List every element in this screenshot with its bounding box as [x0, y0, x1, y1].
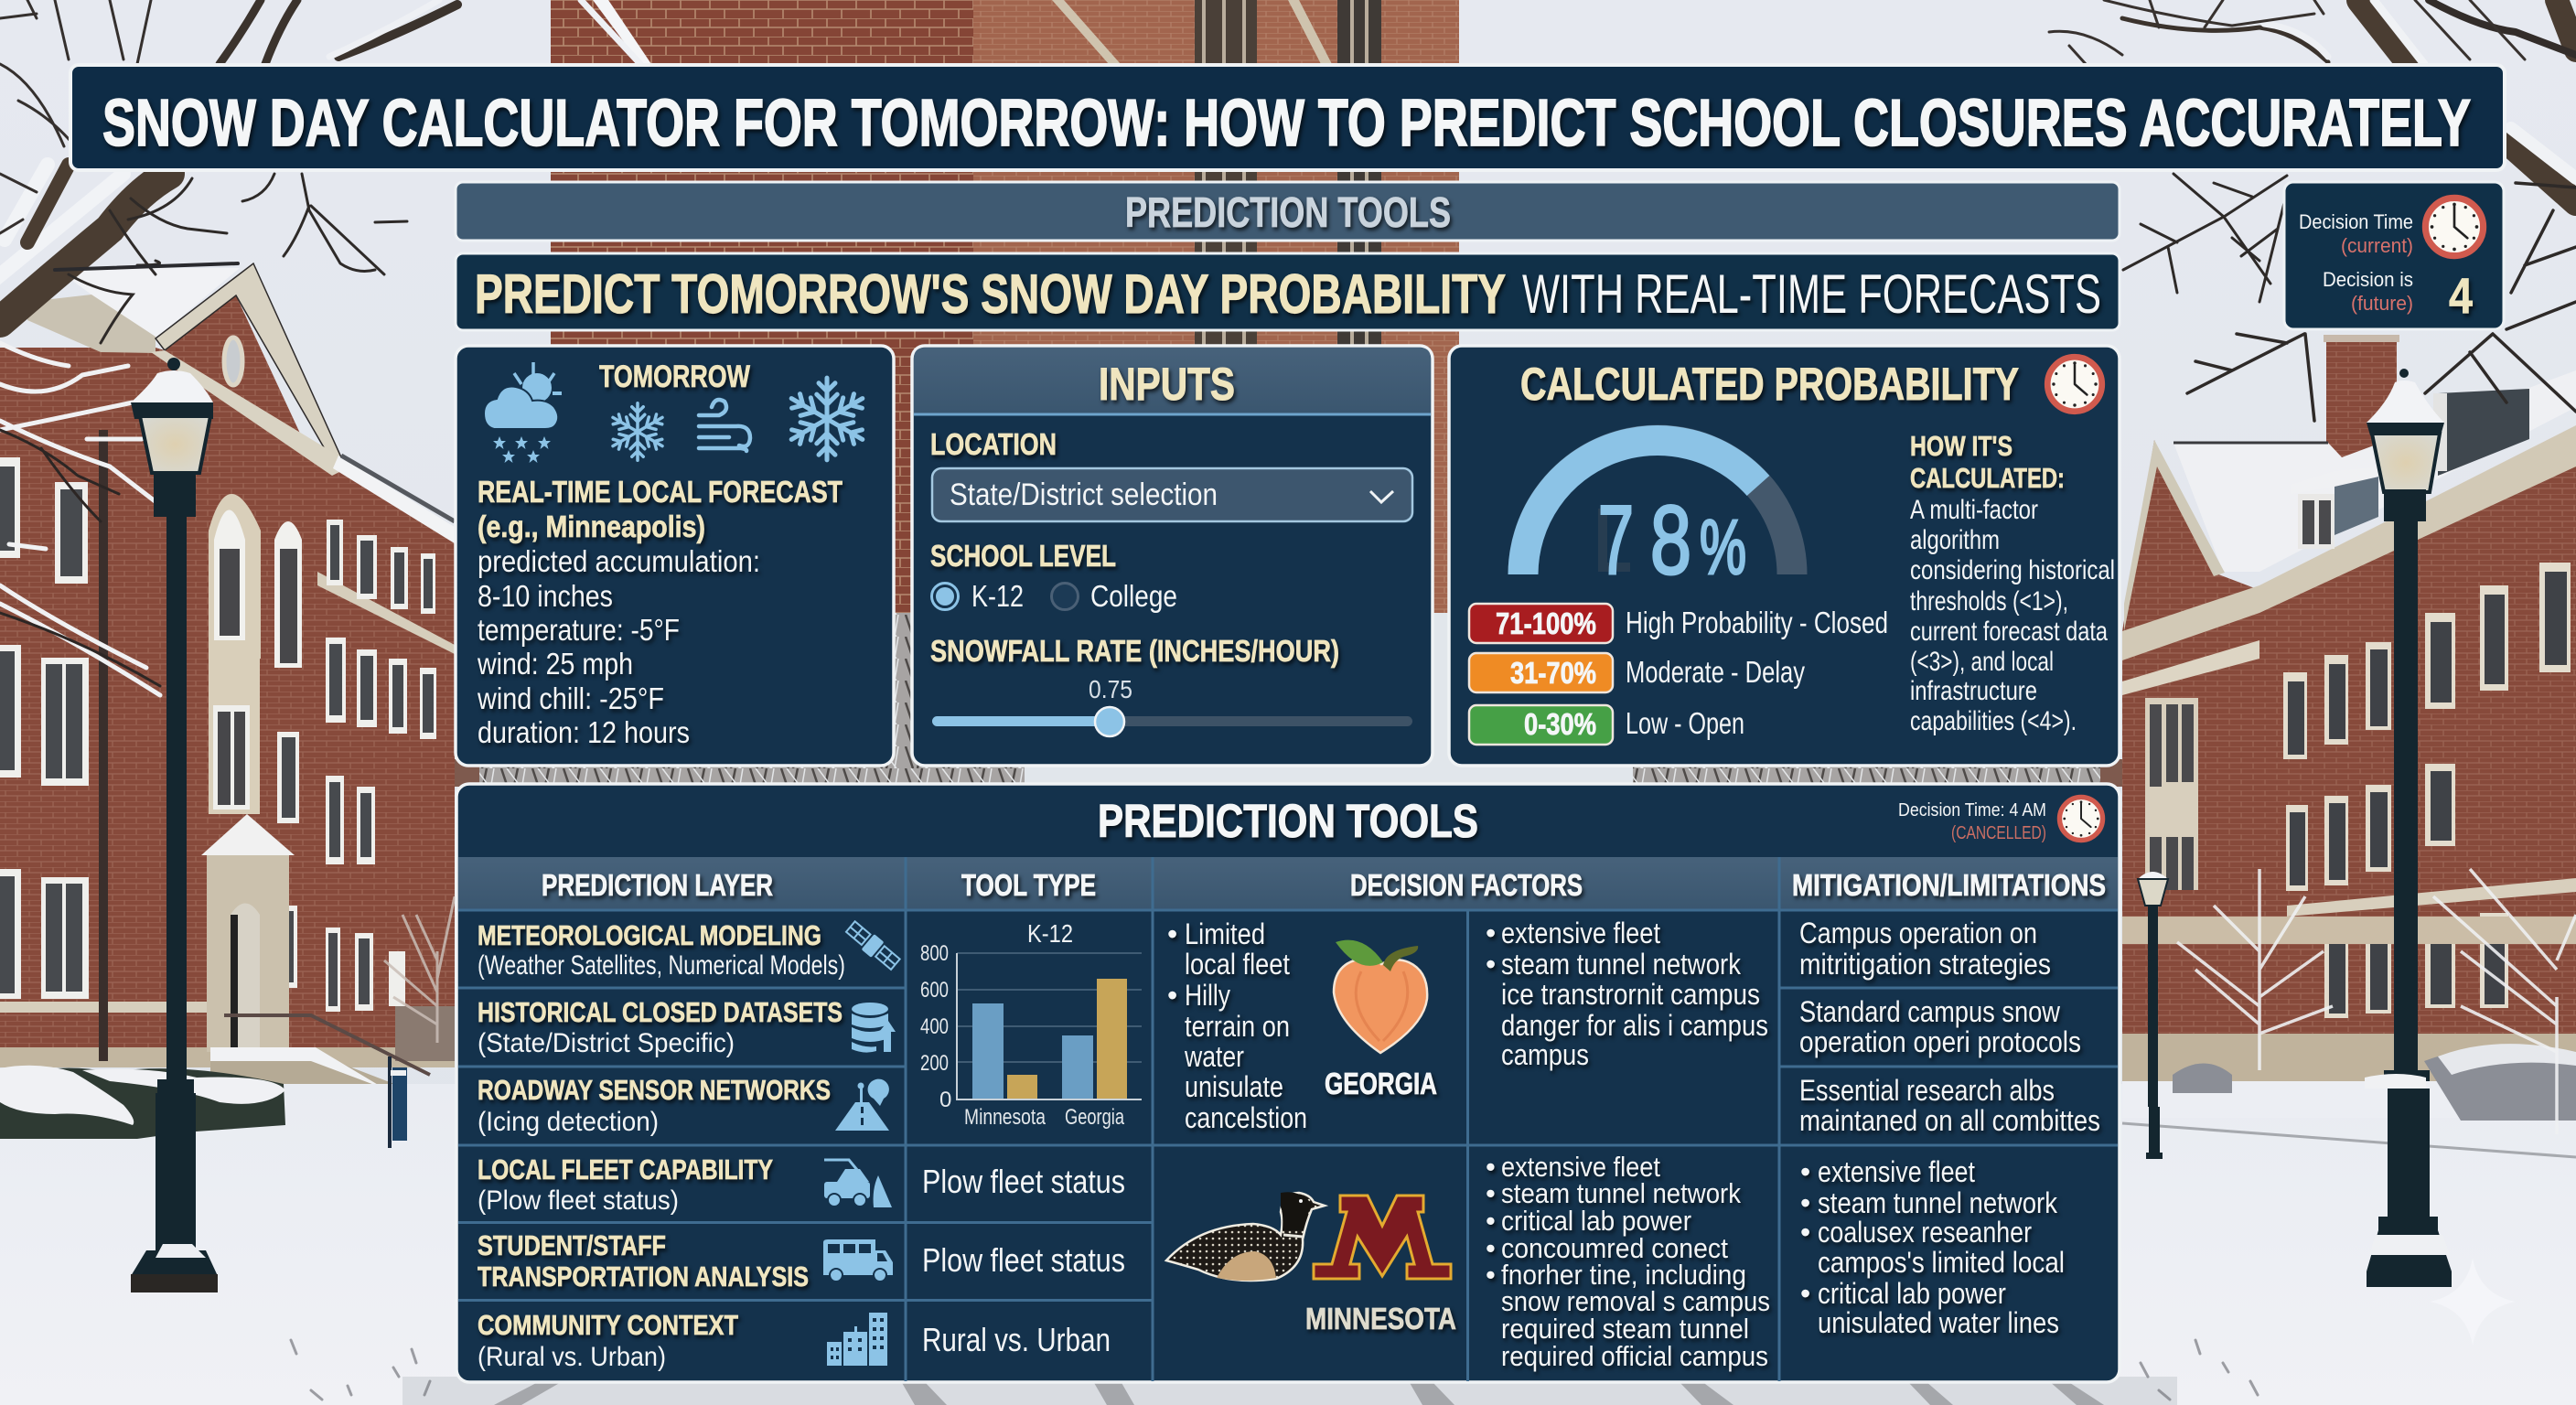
decision factors: lower list: critical lab power [1501, 1205, 1691, 1237]
legend: low: 0-30% [1524, 707, 1596, 741]
row: student staff transportation [478, 1229, 1125, 1292]
row: historical closed datasets: HISTORICAL CLOSED DATASETS [478, 996, 843, 1028]
decision factors: Georgia list: Hilly [1185, 979, 1230, 1012]
bar chart: K-12 closures: Minnesota [964, 1105, 1046, 1130]
row: meteorological modeling: METEOROLOGICAL MODELING [478, 919, 821, 951]
icon: clock [2047, 357, 2102, 412]
decision time callout: Decision is [2323, 268, 2413, 291]
mitigation: upper rows: Essential research albs [1799, 1074, 2055, 1107]
how it's calculated heading [1910, 430, 2065, 494]
mitigation: upper rows: mitritigation strategies [1799, 948, 2051, 981]
legend: moderate: Moderate - Delay [1626, 655, 1805, 689]
decision factors: lower list: extensive fleet [1501, 1151, 1660, 1183]
icon: clock [2425, 198, 2484, 256]
mitigation: lower list: • [1800, 1277, 1810, 1310]
lamp post right large [2365, 369, 2452, 1287]
table heading: PREDICTION TOOLS [1098, 795, 1478, 847]
icon: wind [699, 400, 750, 451]
thick limb [0, 174, 169, 322]
decision factors: upper list: extensive fleet [1501, 917, 1660, 949]
icon: Minnesota M logo [1314, 1196, 1451, 1279]
icon: satellite [843, 919, 902, 972]
decision factors: Georgia list: local fleet [1185, 948, 1290, 981]
forecast heading: (e.g., Minneapolis) [478, 509, 705, 543]
section band: prediction tools [456, 182, 2120, 241]
row: roadway sensor networks: (Icing detection) [478, 1107, 659, 1137]
snowy young trees right [2177, 869, 2576, 1134]
legend: high probability: 71-100% [1496, 606, 1596, 640]
gauge 78 percent: 7 [1598, 485, 1634, 595]
mitigation: upper rows: maintaned on all combittes [1799, 1104, 2100, 1137]
forecast details [477, 544, 760, 749]
row: local fleet capability: LOCAL FLEET CAPABILITY [478, 1153, 773, 1185]
forecast details: predicted accumulation: [478, 544, 760, 578]
forecast details: wind chill: -25°F [477, 681, 664, 715]
mitigation: lower list: steam tunnel network [1818, 1186, 2058, 1219]
radio K-12 selected [931, 579, 1024, 613]
snow covered shrubs [0, 1044, 2576, 1139]
panel: calculated probability [1449, 346, 2120, 766]
radio college: College [1090, 579, 1177, 613]
bar chart: K-12 closures: 800 [920, 941, 949, 966]
decision time callout: (future) [2351, 292, 2413, 315]
decision factors: lower list [1486, 1151, 1770, 1372]
row: student staff transportation: TRANSPORTATION ANALYSIS [478, 1260, 809, 1292]
table header row: PREDICTION LAYER [542, 868, 773, 902]
table header row: TOOL TYPE [961, 868, 1096, 902]
icon: road with pin [835, 1079, 889, 1131]
forecast heading: REAL-TIME LOCAL FORECAST [478, 475, 843, 509]
decision factors: upper list: campus [1501, 1038, 1589, 1071]
ghost digit segments [1603, 509, 1630, 567]
tool type: plow fleet status: Plow fleet status [922, 1163, 1125, 1200]
bar chart: K-12 closures: 200 [920, 1051, 949, 1076]
how it's calculated heading: HOW IT'S [1910, 430, 2012, 462]
how it's calculated body: considering historical [1910, 555, 2115, 585]
decision factors: Georgia list: • [1167, 917, 1177, 950]
left campus building [0, 263, 457, 1118]
icon: small snowflake [609, 403, 666, 460]
snowfall rate label: SNOWFALL RATE (INCHES/HOUR) [930, 634, 1339, 668]
decision factors: lower list: snow removal s campus [1501, 1285, 1770, 1317]
bar chart: K-12 closures: K-12 [1027, 919, 1073, 948]
decision time note: (CANCELLED) [1951, 823, 2046, 843]
how it's calculated body: infrastructure [1910, 676, 2037, 706]
decision factors: upper list: ice transtrornit campus [1501, 978, 1760, 1011]
bar chart: K-12 closures: 400 [920, 1014, 949, 1039]
legend: low: Low - Open [1626, 706, 1744, 740]
blue sign post [388, 1056, 407, 1148]
how it's calculated body: A multi-factor [1910, 495, 2038, 525]
mitigation: lower list: campos's limited local [1818, 1246, 2065, 1279]
row: historical closed datasets: (State/District Specific) [478, 1028, 735, 1058]
decision factors: lower list: • [1486, 1232, 1496, 1264]
gauge 78 percent: % [1700, 504, 1746, 590]
row: meteorological modeling [478, 919, 902, 981]
location dropdown: State/District selection [950, 477, 1218, 512]
panel: prediction tools table [456, 784, 2120, 1382]
bare tree branches top right [2049, 0, 2576, 421]
row: roadway sensor networks: ROADWAY SENSOR NETWORKS [478, 1074, 831, 1106]
decision factors: upper list: steam tunnel network [1501, 948, 1742, 981]
decision factors: Georgia list: terrain on [1185, 1010, 1290, 1043]
forecast details: wind: 25 mph [477, 647, 633, 681]
headline band [456, 253, 2120, 330]
school level label: SCHOOL LEVEL [930, 539, 1116, 573]
mitigation: lower list: • [1800, 1216, 1810, 1249]
decision time callout: (current) [2341, 234, 2413, 257]
lamp post right small [2138, 872, 2168, 1159]
decision time callout [2284, 182, 2504, 329]
tool type: plow fleet status: Plow fleet status [922, 1241, 1125, 1279]
mitigation: lower list: • [1800, 1186, 1810, 1219]
decision factors: upper list: • [1486, 948, 1496, 981]
sparkle watermark [2430, 1258, 2516, 1346]
decision factors: lower list: • [1486, 1151, 1496, 1183]
decision factors: lower list: • [1486, 1177, 1496, 1209]
gauge 78 percent: 8 [1650, 485, 1691, 595]
how it's calculated body: (<3>), and local [1910, 647, 2054, 677]
table header row [458, 857, 2118, 910]
how it's calculated body [1910, 495, 2115, 736]
row: student staff transportation: STUDENT/STAFF [478, 1229, 666, 1261]
decision factors: lower list: concoumred conect [1501, 1232, 1728, 1264]
row: local fleet capability: (Plow fleet status) [478, 1185, 679, 1216]
bar chart: K-12 closures: 600 [920, 978, 949, 1003]
icon: large snowflake [787, 378, 867, 460]
mitigation: lower list: extensive fleet [1818, 1155, 1975, 1188]
bar chart: K-12 closures: 0 [939, 1088, 951, 1112]
mitigation: upper rows: Standard campus snow [1799, 995, 2061, 1028]
decision factors: Georgia list [1167, 917, 1307, 1134]
panel: inputs [912, 346, 1433, 766]
forecast details: duration: 12 hours [478, 715, 690, 749]
band text: PREDICTION TOOLS [1125, 188, 1451, 236]
legend: high probability [1469, 604, 1888, 643]
table grid lines [458, 857, 2118, 1381]
table header row: MITIGATION/LIMITATIONS [1792, 868, 2106, 902]
row: meteorological modeling: (Weather Satellites, Numerical Models) [478, 950, 845, 981]
bar chart: K-12 closures [920, 919, 1142, 1130]
icon: snow plow [824, 1160, 892, 1207]
how it's calculated body: capabilities (<4>). [1910, 706, 2077, 736]
decision factors: Georgia list: unisulate [1185, 1070, 1283, 1103]
decision factors: Georgia list: Limited [1185, 917, 1265, 950]
location dropdown [932, 468, 1412, 521]
headline regular text: WITH REAL-TIME FORECASTS [1522, 263, 2101, 325]
decision factors: lower list: • [1486, 1205, 1496, 1237]
decision factors: lower list: fnorher tine, including [1501, 1259, 1746, 1291]
icon: cloud with sun and snow [484, 362, 562, 463]
decision value 4: 4 [2449, 267, 2473, 324]
decision time callout: Decision Time [2299, 210, 2413, 233]
forecast details: temperature: -5°F [478, 613, 680, 647]
legend: moderate [1469, 653, 1805, 692]
radio college [1052, 579, 1177, 613]
dormer windows [2334, 474, 2378, 535]
icon: city buildings [827, 1313, 887, 1366]
decision factors: lower list: required steam tunnel [1501, 1313, 1749, 1345]
label tomorrow: TOMORROW [599, 359, 751, 394]
label Georgia: GEORGIA [1325, 1067, 1437, 1100]
how it's calculated body: algorithm [1910, 525, 2000, 555]
decision factors: lower list: steam tunnel network [1501, 1177, 1741, 1209]
mitigation: lower list: • [1800, 1155, 1810, 1188]
snow roof [55, 268, 240, 338]
decision factors: lower list: • [1486, 1259, 1496, 1291]
right campus building [2122, 335, 2576, 1084]
tool type: rural vs urban: Rural vs. Urban [922, 1321, 1111, 1358]
row: roadway sensor networks [478, 1074, 889, 1137]
row: historical closed datasets [478, 996, 896, 1058]
label Minnesota: MINNESOTA [1305, 1302, 1456, 1335]
row: local fleet capability [478, 1153, 1125, 1216]
snow ground [0, 1081, 2576, 1405]
forecast details: 8-10 inches [478, 579, 613, 613]
mitigation: lower list: coalusex reseanher [1818, 1216, 2032, 1249]
mitigation: upper rows: operation operi protocols [1799, 1025, 2081, 1058]
decision factors: upper list: • [1486, 917, 1496, 949]
decision time note [1898, 797, 2103, 843]
mitigation: upper rows: Campus operation on [1799, 917, 2037, 949]
mitigation: lower list [1800, 1155, 2065, 1339]
panel: tomorrow forecast [456, 346, 894, 766]
mitigation: lower list: critical lab power [1818, 1277, 2006, 1310]
icon: bus [823, 1239, 893, 1282]
location label: LOCATION [930, 427, 1057, 461]
decision factors: lower list: required official campus [1501, 1340, 1768, 1372]
decision factors: Georgia list: cancelstion [1185, 1101, 1307, 1134]
table header row: DECISION FACTORS [1350, 868, 1583, 902]
icon: Minnesota loon [1166, 1192, 1325, 1281]
headline bold text: PREDICT TOMORROW'S SNOW DAY PROBABILITY [475, 263, 1506, 325]
radio K-12 selected: K-12 [971, 579, 1024, 613]
how it's calculated heading: CALCULATED: [1910, 462, 2065, 494]
decision factors: Georgia list: • [1167, 979, 1177, 1012]
gable frame [156, 263, 341, 460]
mitigation: lower list: unisulated water lines [1818, 1306, 2059, 1339]
lamp post left [131, 358, 218, 1292]
row: community context [478, 1309, 1111, 1372]
decision factors: upper list: danger for alis i campus [1501, 1009, 1768, 1042]
decision time note: Decision Time: 4 AM [1898, 800, 2046, 820]
decision factors: upper list [1486, 917, 1768, 1071]
snowfall rate slider [932, 675, 1412, 736]
icon: database [852, 1003, 896, 1053]
legend: low [1469, 705, 1744, 745]
bare tree branches top left [0, 0, 640, 695]
how it's calculated body: current forecast data [1910, 617, 2108, 647]
row: community context: COMMUNITY CONTEXT [478, 1309, 738, 1341]
inputs heading: INPUTS [1099, 359, 1235, 410]
legend: moderate: 31-70% [1510, 656, 1596, 690]
snowfall rate slider: 0.75 [1089, 675, 1132, 703]
mitigation: upper rows [1799, 917, 2100, 1137]
central brick building [448, 0, 2131, 787]
gauge 78 percent [1523, 440, 1792, 595]
bar chart: K-12 closures: Georgia [1065, 1105, 1124, 1130]
icon: Georgia peach [1334, 940, 1427, 1053]
row: community context: (Rural vs. Urban) [478, 1342, 666, 1372]
probability heading: CALCULATED PROBABILITY [1520, 359, 2019, 410]
how it's calculated body: thresholds (<1>), [1910, 586, 2068, 617]
decision factors: Georgia list: water [1184, 1040, 1244, 1073]
forecast heading [478, 475, 843, 543]
legend: high probability: High Probability - Closed [1626, 606, 1888, 639]
title banner [70, 65, 2505, 170]
